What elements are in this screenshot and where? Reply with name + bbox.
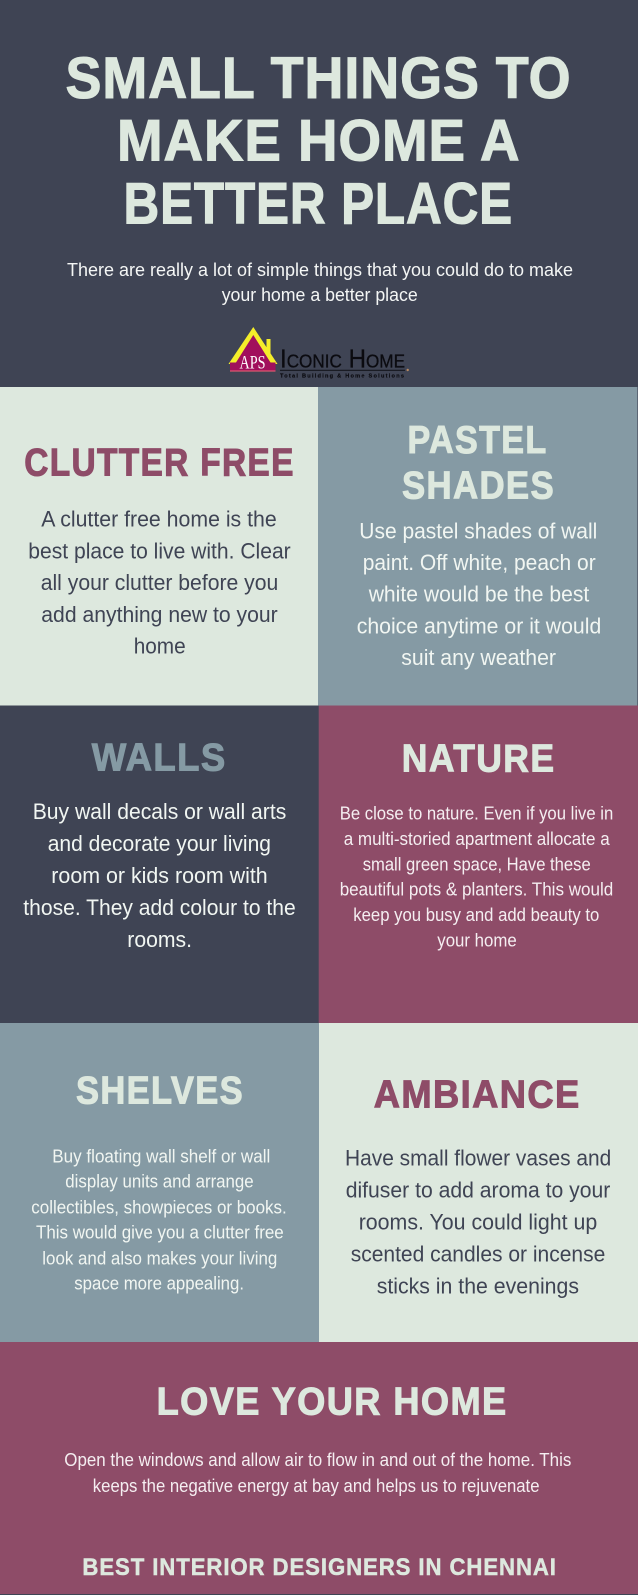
body text: clutter free: A clutter free home is the (41, 506, 277, 531)
body text: walls: Buy wall decals or wall arts (33, 799, 286, 824)
body text: ambiance (345, 1146, 611, 1299)
footer tagline: BEST INTERIOR DESIGNERS IN CHENNAI (82, 1554, 557, 1581)
panel: walls (0, 706, 319, 1023)
subtitle: There are really a lot of simple things that you could do to make (67, 259, 573, 280)
body text: pastel shades: white would be the best (368, 582, 589, 607)
body text: clutter free: home (134, 634, 186, 659)
logo: Iconic Home (228, 327, 409, 379)
body text: love your home: keeps the negative energy at bay and helps us to rejuvenate (93, 1475, 540, 1496)
body text: nature: a multi-storied apartment allocate a (344, 828, 610, 849)
heading: pastel shades: PASTEL (408, 419, 548, 462)
body text: walls: those. They add colour to the (23, 895, 296, 920)
body text: shelves: space more appealing. (74, 1272, 244, 1293)
body text: walls (23, 799, 296, 952)
body text: pastel shades: paint. Off white, peach or (363, 550, 596, 575)
body text: nature: Be close to nature. Even if you live in (340, 802, 613, 823)
icon: house: APS (240, 352, 266, 374)
body text: shelves: This would give you a clutter free (36, 1222, 284, 1243)
body text: walls: rooms. (127, 927, 192, 952)
body text: clutter free: add anything new to your (41, 602, 278, 627)
body text: pastel shades (357, 518, 601, 670)
title: SMALL THINGS TO (66, 46, 572, 111)
title: BETTER PLACE (124, 172, 513, 237)
body text: shelves (31, 1146, 287, 1293)
body text: ambiance: sticks in the evenings (377, 1274, 579, 1299)
body text: clutter free: all your clutter before you (41, 570, 278, 595)
logo wordmark: ICONIC HOME (280, 343, 405, 373)
body text: love your home (64, 1449, 571, 1496)
body text: walls: and decorate your living (48, 831, 271, 856)
heading: love your home: LOVE YOUR HOME (157, 1381, 508, 1424)
panel: nature (319, 706, 638, 1023)
body text: ambiance: Have small flower vases and (345, 1146, 611, 1171)
panel: pastel shades (318, 387, 637, 706)
subtitle: your home a better place (222, 284, 418, 305)
body text: nature: beautiful pots & planters. This would (340, 878, 613, 900)
icon: house (228, 327, 278, 374)
heading: walls: WALLS (92, 737, 227, 780)
body text: ambiance: difuser to add aroma to your (346, 1178, 610, 1203)
body text: clutter free (28, 506, 291, 659)
body text: walls: room or kids room with (51, 863, 268, 888)
body text: clutter free: best place to live with. Clear (28, 538, 291, 563)
body text: ambiance: scented candles or incense (351, 1242, 605, 1267)
body text: nature (340, 802, 613, 950)
body text: shelves: collectibles, showpieces or books. (31, 1196, 287, 1217)
title: MAKE HOME A (117, 109, 520, 174)
body text: love your home: Open the windows and allow air to flow in and out of the home. This (64, 1449, 571, 1470)
heading: nature: NATURE (402, 738, 555, 781)
heading: pastel shades (402, 419, 555, 508)
body text: shelves: display units and arrange (65, 1171, 254, 1192)
panel: clutter free (0, 387, 318, 706)
panel: shelves (0, 1023, 319, 1342)
panel: ambiance (319, 1023, 638, 1342)
header panel (0, 0, 638, 387)
heading: pastel shades: SHADES (402, 465, 555, 508)
logo wordmark: Total Building & Home Solutions (280, 373, 404, 379)
body text: nature: your home (437, 929, 517, 950)
subtitle (67, 259, 573, 305)
body text: shelves: look and also makes your living (42, 1247, 277, 1268)
heading: clutter free: CLUTTER FREE (24, 442, 295, 485)
body text: pastel shades: suit any weather (401, 645, 556, 670)
heading: shelves: SHELVES (76, 1069, 244, 1112)
body text: ambiance: rooms. You could light up (359, 1210, 597, 1235)
panel: love your home (0, 1342, 638, 1594)
body text: pastel shades: Use pastel shades of wall (359, 518, 597, 543)
body text: nature: small green space, Have these (363, 853, 591, 874)
body text: nature: keep you busy and add beauty to (353, 904, 599, 925)
body text: pastel shades: choice anytime or it would (357, 613, 601, 638)
body text: shelves: Buy floating wall shelf or wall (52, 1146, 270, 1167)
heading: ambiance: AMBIANCE (374, 1074, 581, 1117)
title (66, 46, 572, 237)
